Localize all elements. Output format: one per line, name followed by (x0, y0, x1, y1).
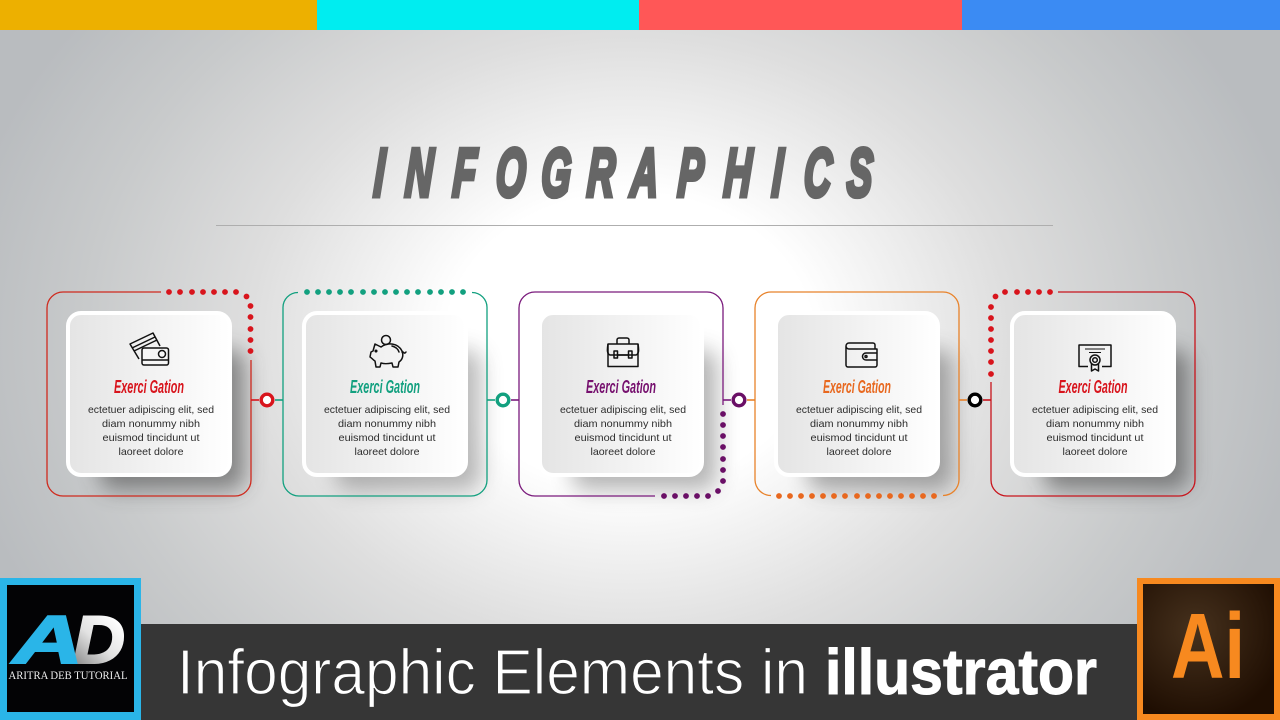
card 5 body: diam nonummy nibh (1046, 418, 1144, 430)
card 2 (283, 289, 487, 496)
card 2 frame (283, 292, 487, 496)
card 4 panel (776, 313, 938, 475)
logo: Aritra Deb Tutorial (0, 578, 141, 720)
card 5 heading: Exerci Gation (1058, 377, 1128, 397)
card 4 body: diam nonummy nibh (810, 418, 908, 430)
card 4 body: ectetuer adipiscing elit, sed (796, 404, 922, 416)
card 2 body: euismod tincidunt ut (338, 432, 436, 444)
card 5 body (1032, 404, 1158, 458)
card 5 dotted corner (988, 289, 1053, 377)
card 2 heading: Exerci Gation (350, 377, 420, 397)
icon: certificate (1079, 345, 1111, 371)
card 5 body: laoreet dolore (1062, 446, 1128, 458)
top colour bar (0, 0, 1280, 30)
connector 2 (487, 394, 519, 406)
card 5 (988, 289, 1195, 496)
card 1 dotted corner (166, 289, 253, 354)
card 1 (47, 289, 253, 496)
card 4 body: euismod tincidunt ut (810, 432, 908, 444)
card 1 body: diam nonummy nibh (102, 418, 200, 430)
card 3 frame (519, 292, 723, 496)
bottom banner (141, 624, 1137, 720)
card 1 panel (68, 313, 230, 475)
card 4 (755, 292, 959, 499)
card 1 shadow (100, 350, 245, 490)
icon: credit cards (130, 333, 168, 365)
card 5 body: euismod tincidunt ut (1046, 432, 1144, 444)
icon: briefcase (607, 338, 639, 366)
card 1 body: ectetuer adipiscing elit, sed (88, 404, 214, 416)
banner title: Infographic Elements in (177, 636, 808, 708)
card 4 body (796, 404, 922, 458)
card 3 (519, 292, 726, 499)
title: INFOGRAPHICS (372, 134, 875, 211)
card 5 panel (1012, 313, 1174, 475)
card 3 body (560, 404, 686, 458)
card 1 frame (47, 292, 251, 496)
card 4 body: laoreet dolore (826, 446, 892, 458)
logo: Adobe Illustrator (1137, 578, 1280, 720)
card 1 body: euismod tincidunt ut (102, 432, 200, 444)
banner title bold: illustrator (825, 636, 1097, 708)
card 3 shadow (572, 350, 717, 490)
card 2 shadow (336, 350, 481, 490)
card 1 body (88, 404, 214, 458)
card 1 body: laoreet dolore (118, 446, 184, 458)
card 3 body: euismod tincidunt ut (574, 432, 672, 444)
card 5 shadow (1044, 350, 1189, 490)
card 4 heading: Exerci Gation (823, 377, 891, 397)
card 2 body (324, 404, 450, 458)
card 3 body: laoreet dolore (590, 446, 656, 458)
card 1 heading: Exerci Gation (114, 377, 184, 397)
card 2 body: diam nonummy nibh (338, 418, 436, 430)
card 2 dotted edge (304, 289, 466, 295)
card 2 panel (304, 313, 466, 475)
card 4 frame (755, 292, 959, 496)
card 5 frame (991, 292, 1195, 496)
card 3 body: diam nonummy nibh (574, 418, 672, 430)
title rule (216, 225, 1053, 226)
card 3 body: ectetuer adipiscing elit, sed (560, 404, 686, 416)
card 4 shadow (808, 350, 953, 490)
connector 4 (959, 394, 991, 406)
card 3 heading: Exerci Gation (586, 377, 656, 397)
connector 1 (251, 394, 283, 406)
logo D: D (73, 602, 125, 678)
card 5 body: ectetuer adipiscing elit, sed (1032, 404, 1158, 416)
icon: wallet (846, 343, 877, 367)
icon: piggy bank (370, 336, 406, 367)
logo A: A (10, 602, 83, 678)
card 2 body: ectetuer adipiscing elit, sed (324, 404, 450, 416)
logo caption: ARITRA DEB TUTORIAL (8, 668, 128, 682)
card 3 panel (540, 313, 702, 475)
connector 3 (723, 394, 755, 406)
card 3 dotted corner (661, 411, 726, 499)
card 2 body: laoreet dolore (354, 446, 420, 458)
card 4 dotted edge (776, 493, 937, 499)
Ai letters: Ai (1171, 594, 1245, 698)
